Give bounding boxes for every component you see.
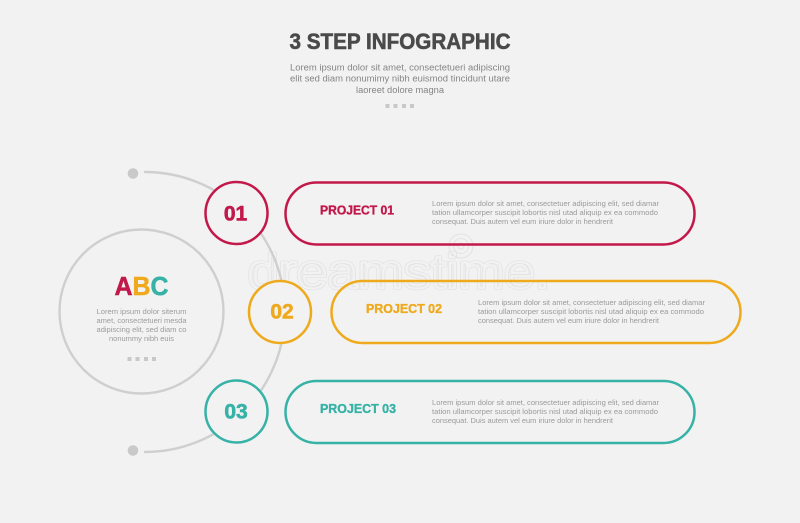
- bottom arc end dot: [128, 445, 138, 456]
- panel: central ABC circle: [60, 230, 224, 394]
- project 01 text: [432, 200, 660, 226]
- ABC dots: [128, 357, 156, 361]
- project 03 text: Lorem ipsum dolor sit amet, consectetuer adipiscing elit, sed diamar: [432, 399, 660, 407]
- project 02 text: consequat. Duis autem vel eum iriure dolor in hendrerit: [478, 317, 659, 325]
- title: 3 STEP INFOGRAPHIC: [290, 29, 510, 54]
- project 03 label: PROJECT 03: [320, 402, 396, 416]
- panel: project 01: [286, 182, 694, 244]
- project 03 text: tation ullamcorper suscipit lobortis nisl utad aliquip ex ea commodo: [432, 408, 658, 416]
- step 01 badge: [206, 182, 268, 244]
- subtitle: laoreet dolore magna: [356, 85, 445, 96]
- project 02 label: PROJECT 02: [366, 302, 442, 316]
- ABC body text: nonummy nibh euis: [109, 334, 174, 343]
- project 01 label: PROJECT 01: [320, 204, 394, 218]
- panel: project 03: [286, 381, 694, 443]
- project 02 text: tation ullamcorper suscipit lobortis nisl utad aliquip ex ea commodo: [478, 308, 704, 316]
- project 01 text: consequat. Duis autem vel eum iriure dolor in hendrerit: [432, 218, 613, 226]
- step 02 badge: [249, 281, 311, 343]
- project 03 text: [432, 399, 660, 425]
- ABC body text: adipiscing elit, sed diam co: [96, 325, 186, 334]
- step 03 badge: [206, 380, 268, 442]
- project 01 text: tation ullamcorper suscipit lobortis nisl utad aliquip ex ea commodo: [432, 209, 658, 217]
- title dots: [386, 104, 414, 108]
- subtitle: elit sed diam nonumimy nibh euismod tincidunt utare: [290, 74, 510, 84]
- watermark: dreamstime.: [248, 246, 550, 299]
- ABC heading: ABC: [114, 271, 169, 301]
- project 02 text: [478, 299, 706, 325]
- connector arc: [145, 172, 285, 452]
- project 01 text: Lorem ipsum dolor sit amet, consectetuer adipiscing elit, sed diamar: [432, 200, 660, 208]
- ABC body text: [96, 307, 187, 343]
- step 03 badge: 03: [224, 400, 248, 424]
- ABC body text: Lorem ipsum dolor siterum: [96, 307, 186, 316]
- ABC body text: amet, consectetueri mesda: [96, 316, 187, 325]
- top arc end dot: [128, 168, 138, 179]
- project 02 text: Lorem ipsum dolor sit amet, consectetuer adipiscing elit, sed diamar: [478, 299, 706, 307]
- panel: project 02: [332, 281, 740, 343]
- subtitle: [290, 62, 510, 96]
- project 03 text: consequat. Duis autem vel eum iriure dolor in hendrerit: [432, 417, 613, 425]
- step 01 badge: 01: [224, 202, 247, 226]
- step 02 badge: 02: [270, 300, 294, 324]
- subtitle: Lorem ipsum dolor sit amet, consectetueri adipiscing: [290, 62, 510, 74]
- watermark: dreamstime.: [248, 246, 550, 299]
